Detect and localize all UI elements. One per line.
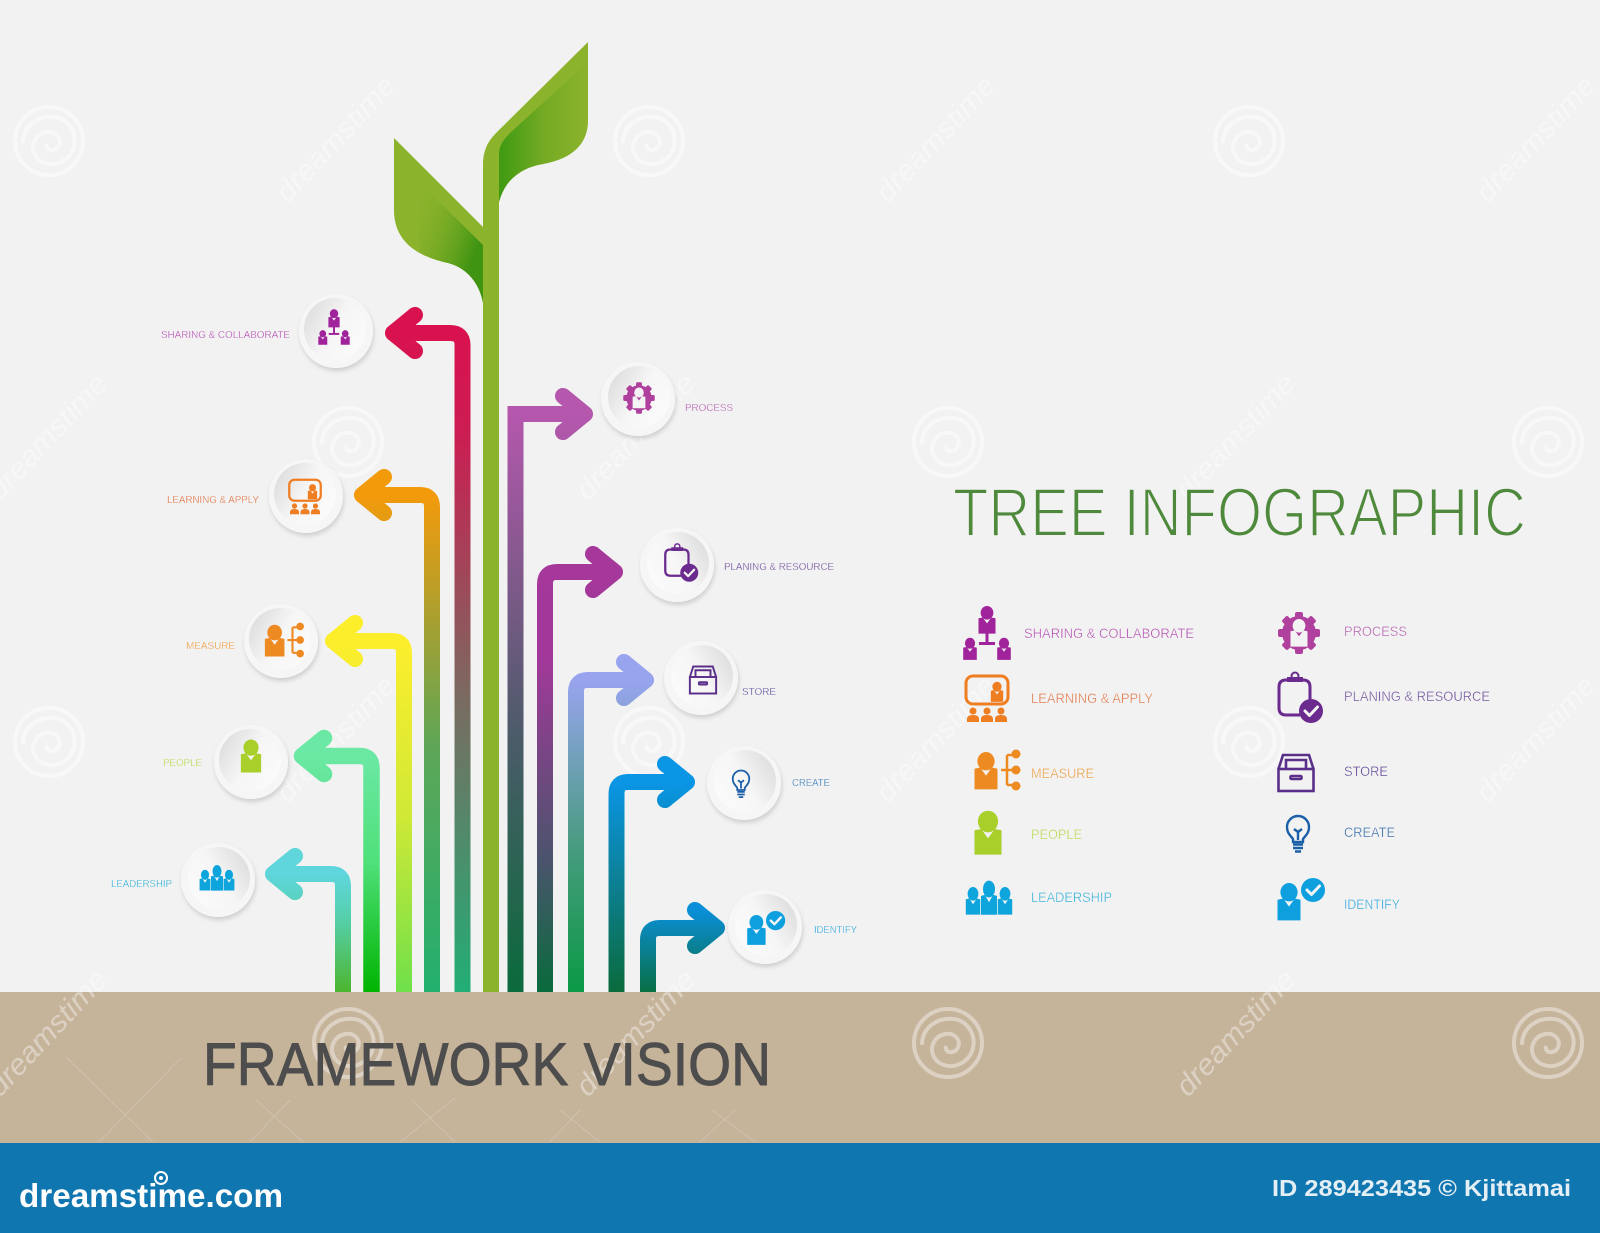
- arrow: store: [576, 662, 646, 992]
- arrow: create: [616, 764, 687, 992]
- arrow: measure: [333, 623, 404, 992]
- node: leadership: LEADERSHIP: [111, 878, 172, 890]
- node: measure: MEASURE: [186, 640, 235, 652]
- arrow: identify: [648, 910, 717, 992]
- legend: planing & resource: PLANING & RESOURCE: [1344, 688, 1490, 704]
- framework vision heading: FRAMEWORK VISION: [203, 1031, 771, 1098]
- arrow: planing & resource: [545, 554, 615, 992]
- legend: sharing & collaborate: [963, 606, 1194, 660]
- legend: people: [974, 811, 1082, 855]
- legend: planing & resource: [1279, 672, 1490, 723]
- node: learning & apply: [167, 459, 343, 533]
- node: process: [601, 362, 733, 436]
- node: learning & apply: LEARNING & APPLY: [167, 494, 259, 506]
- watermark pattern: dreamstime: [869, 669, 1002, 809]
- arrow: sharing & collaborate: [393, 315, 462, 992]
- legend: leadership: LEADERSHIP: [1031, 889, 1112, 905]
- arrow: learning & apply: [362, 477, 432, 992]
- node: measure: [186, 604, 318, 678]
- watermark pattern: [0, 69, 1600, 809]
- legend: store: STORE: [1344, 763, 1388, 779]
- node: planing & resource: PLANING & RESOURCE: [724, 561, 834, 573]
- legend: identify: [1278, 878, 1401, 920]
- watermark pattern: dreamstime: [269, 69, 402, 209]
- footer bar: [0, 1143, 1600, 1233]
- watermark pattern: dreamstime: [269, 669, 402, 809]
- footer credit: ID 289423435 © Kjittamai: [1272, 1175, 1571, 1201]
- node: store: STORE: [742, 686, 776, 698]
- legend: learning & apply: LEARNING & APPLY: [1031, 690, 1154, 706]
- legend: store: [1278, 755, 1388, 791]
- node: planing & resource: [640, 528, 834, 602]
- node: sharing & collaborate: SHARING & COLLABORATE: [161, 329, 290, 341]
- legend: measure: MEASURE: [1031, 765, 1094, 781]
- node: people: [163, 725, 288, 799]
- node: store: [664, 641, 776, 715]
- arrow: people: [302, 738, 372, 992]
- node: process: PROCESS: [685, 402, 733, 414]
- watermark pattern: dreamstime: [1169, 367, 1302, 507]
- ground watermark: [0, 963, 1582, 1142]
- node: leadership: [111, 843, 255, 917]
- watermark pattern: dreamstime: [1469, 669, 1600, 809]
- arrow: leadership: [273, 856, 343, 992]
- plant: stem and leaves: [394, 42, 588, 992]
- legend: learning & apply: [966, 676, 1154, 722]
- legend: identify: IDENTIFY: [1344, 896, 1401, 912]
- ground watermark: dreamstime: [1169, 963, 1302, 1103]
- arrow: process: [516, 396, 585, 992]
- legend: create: CREATE: [1344, 824, 1395, 840]
- node: identify: IDENTIFY: [814, 924, 857, 936]
- node: sharing & collaborate: [161, 294, 373, 368]
- watermark pattern: dreamstime: [869, 69, 1002, 209]
- watermark pattern: dreamstime: [569, 367, 702, 507]
- legend: measure: [974, 750, 1094, 790]
- ground band: [0, 992, 1600, 1143]
- node: identify: [728, 890, 857, 964]
- legend: create: [1287, 816, 1395, 852]
- node: people: PEOPLE: [163, 757, 202, 769]
- node: create: [707, 746, 830, 820]
- legend: process: [1278, 612, 1407, 654]
- footer logo: dreamstime.com: [19, 1177, 283, 1214]
- watermark pattern: dreamstime: [1469, 69, 1600, 209]
- legend: people: PEOPLE: [1031, 826, 1082, 842]
- node: create: CREATE: [792, 777, 830, 789]
- legend: leadership: [966, 881, 1112, 915]
- ground watermark: dreamstime: [569, 963, 702, 1103]
- legend: process: PROCESS: [1344, 623, 1407, 639]
- legend: sharing & collaborate: SHARING & COLLABORATE: [1024, 625, 1194, 641]
